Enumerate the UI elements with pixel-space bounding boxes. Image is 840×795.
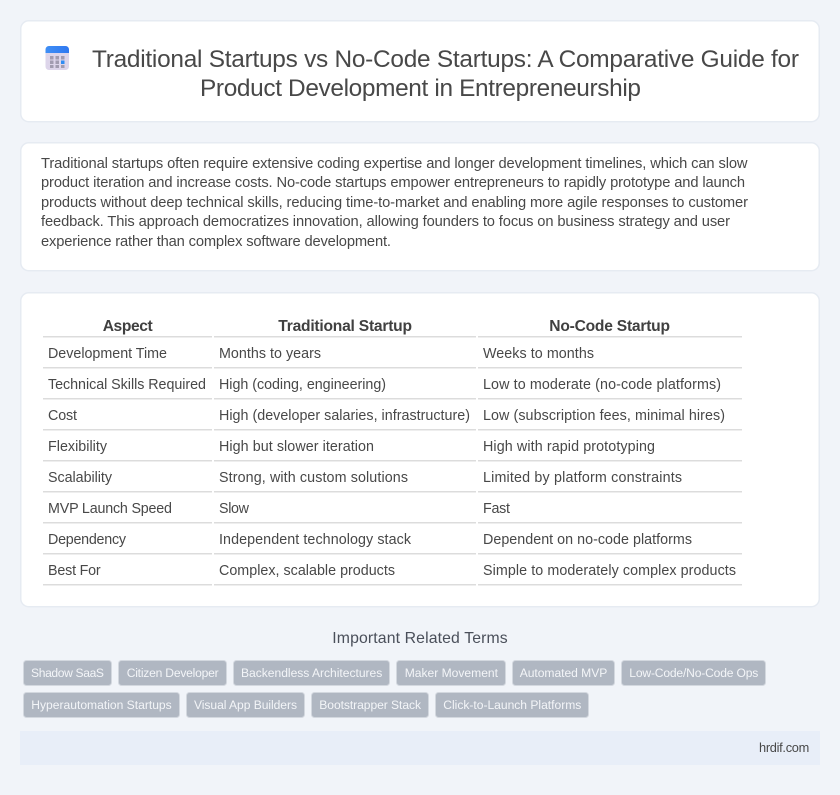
tag: Citizen Developer bbox=[118, 660, 226, 686]
table row: Scalability: Strong, with custom solutions bbox=[219, 470, 408, 486]
text block: introduction paragraph: feedback. This approach democratizes innovation, allowing founders to focus on business strategy and user bbox=[41, 214, 730, 230]
table row: Scalability: Limited by platform constraints bbox=[483, 470, 682, 486]
tag: Click-to-Launch Platforms bbox=[436, 692, 588, 718]
table row: Development Time: Development Time bbox=[48, 346, 167, 362]
table row: Best For bbox=[43, 563, 742, 586]
table row: Flexibility: High but slower iteration bbox=[219, 439, 374, 455]
table row: Dependency: Independent technology stack bbox=[219, 532, 412, 548]
table row: Best For: Complex, scalable products bbox=[219, 563, 395, 579]
table row: Development Time: Weeks to months bbox=[483, 346, 594, 362]
panel: header bbox=[21, 21, 819, 122]
table row: Cost: Low (subscription fees, minimal hires) bbox=[483, 408, 725, 424]
table row: Flexibility bbox=[43, 439, 742, 462]
panel: comparison table bbox=[21, 293, 819, 607]
table row: Technical Skills Required: Low to moderate (no-code platforms) bbox=[483, 377, 721, 393]
table row: Dependency bbox=[43, 532, 742, 554]
text block: introduction paragraph bbox=[41, 156, 748, 250]
tag: Low-Code/No-Code Ops: Low-Code/No-Code Ops bbox=[629, 666, 758, 680]
table row: MVP Launch Speed: MVP Launch Speed bbox=[48, 501, 172, 517]
table row: MVP Launch Speed: Fast bbox=[483, 501, 510, 517]
tag: Bootstrapper Stack: Bootstrapper Stack bbox=[319, 698, 422, 712]
tag: Visual App Builders: Visual App Builders bbox=[194, 698, 297, 712]
panel: related term tags bbox=[24, 660, 766, 718]
tag: Maker Movement bbox=[396, 660, 506, 686]
tag: Click-to-Launch Platforms: Click-to-Launch Platforms bbox=[443, 698, 581, 712]
table row: Best For: Best For bbox=[48, 563, 101, 579]
table row: Cost bbox=[43, 408, 742, 430]
table header row: Aspect bbox=[103, 318, 153, 335]
text block: introduction paragraph: experience rather than complex software development. bbox=[41, 234, 391, 250]
title: Product Development in Entrepreneurship bbox=[200, 75, 641, 102]
table row: Scalability: Scalability bbox=[48, 470, 113, 486]
text block: introduction paragraph: products without deep technical skills, reducing time-to-market and enabling more agile responses to customer bbox=[41, 195, 748, 211]
table row: MVP Launch Speed bbox=[43, 501, 742, 524]
text block: introduction paragraph: Traditional startups often require extensive coding expertise and longer development timelines, which can slow bbox=[41, 156, 748, 172]
table row: Development Time bbox=[43, 346, 742, 368]
table row: Cost: Cost bbox=[48, 408, 77, 424]
tag: Shadow SaaS: Shadow SaaS bbox=[31, 666, 104, 680]
table row: Technical Skills Required: High (coding, engineering) bbox=[219, 377, 386, 393]
table row: Technical Skills Required bbox=[43, 377, 742, 400]
icon: calendar bbox=[46, 46, 69, 70]
table header row bbox=[43, 318, 742, 338]
table row: MVP Launch Speed: Slow bbox=[219, 501, 250, 517]
table row: Best For: Simple to moderately complex products bbox=[483, 563, 736, 579]
footer bbox=[20, 731, 820, 765]
tag: Automated MVP bbox=[512, 660, 614, 686]
table header row: No-Code Startup bbox=[549, 318, 670, 335]
tag: Automated MVP: Automated MVP bbox=[520, 666, 607, 680]
table row: Flexibility: Flexibility bbox=[48, 439, 108, 455]
panel: introduction bbox=[21, 143, 819, 271]
table row: Development Time: Months to years bbox=[219, 346, 321, 362]
heading: related terms: Important Related Terms bbox=[332, 630, 508, 647]
tag: Hyperautomation Startups bbox=[24, 692, 180, 718]
tag: Backendless Architectures: Backendless Architectures bbox=[241, 666, 382, 680]
tag: Hyperautomation Startups: Hyperautomation Startups bbox=[31, 698, 172, 712]
tag: Citizen Developer: Citizen Developer bbox=[127, 666, 219, 680]
table row: Technical Skills Required: Technical Skills Required bbox=[48, 377, 206, 393]
tag: Shadow SaaS bbox=[24, 660, 112, 686]
table row: Cost: High (developer salaries, infrastructure) bbox=[219, 408, 470, 424]
table row: Dependency: Dependency bbox=[48, 532, 127, 548]
table header row: Traditional Startup bbox=[278, 318, 412, 335]
tag: Visual App Builders bbox=[186, 692, 304, 718]
tag: Maker Movement: Maker Movement bbox=[405, 666, 499, 680]
tag: Backendless Architectures bbox=[234, 660, 390, 686]
tag: Bootstrapper Stack bbox=[312, 692, 428, 718]
title: Traditional Startups vs No-Code Startups: A Comparative Guide for bbox=[92, 46, 799, 73]
table row: Flexibility: High with rapid prototyping bbox=[483, 439, 655, 455]
text block: introduction paragraph: product iteration and increase costs. No-code startups empower entrepreneurs to rapidly prototype and launch bbox=[41, 175, 745, 191]
table row: Dependency: Dependent on no-code platforms bbox=[483, 532, 692, 548]
footer: hrdif.com bbox=[759, 740, 809, 755]
tag: Low-Code/No-Code Ops bbox=[622, 660, 766, 686]
title bbox=[92, 46, 799, 102]
table row: Scalability bbox=[43, 470, 742, 492]
